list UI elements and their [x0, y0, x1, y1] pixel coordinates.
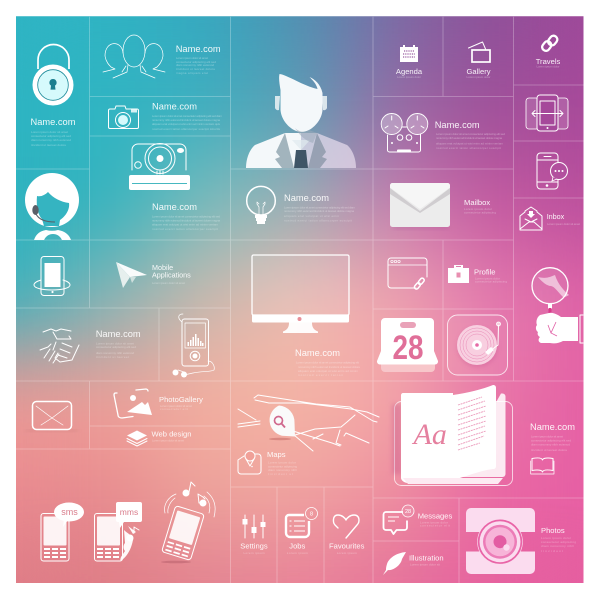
- icon: jobs list with badge: 8: [310, 512, 313, 518]
- text: settings label: Lorem ipsum: [244, 551, 265, 555]
- text: handshake name: tincidunt ut laoreet: [96, 355, 129, 359]
- text: small camera name: Lorem ipsum dolor sit amet consectetur adipiscing elit sed diam: [152, 114, 222, 118]
- text: photos label: consectetur adipiscing: [541, 540, 576, 544]
- text: settings label: Settings: [240, 542, 268, 551]
- text: book name: consectetur adipiscing elit sed: [531, 438, 571, 442]
- icon: sms phone: sms: [61, 507, 78, 517]
- text: instant camera name: Lorem ipsum dolor sit amet consectetur adipiscing elit sed: [152, 214, 220, 218]
- text: mobile applications label: [152, 263, 191, 285]
- icon: small open book: [531, 458, 554, 474]
- icon: instant camera: [129, 144, 190, 190]
- text: settings label: [240, 542, 268, 555]
- icon: music player with earphones: [172, 314, 214, 378]
- text: instant camera name: [152, 202, 220, 231]
- text: mobile applications label: Lorem ipsum dolor sit amet: [152, 281, 185, 285]
- text: bulb name: [284, 193, 356, 222]
- text: inbox label: Inbox: [547, 212, 565, 221]
- icon: open book with Aa: Aa: [412, 418, 447, 451]
- text: small camera name: [152, 102, 222, 131]
- text: people name: tincidunt ut laoreet dolore: [176, 67, 215, 71]
- icon: mms phone with music: [94, 502, 142, 561]
- text: messages label: consectetur elit: [420, 524, 450, 528]
- text: maps label: Lorem ipsum dolor: [268, 460, 296, 464]
- text: monitor name: nostrud exerci tation: [298, 373, 343, 377]
- text: maps label: diam nonummy nibh: [268, 468, 297, 472]
- text: people name: consectetur adipiscing elit sed: [176, 60, 216, 64]
- icon: mms phone with music: mms: [120, 507, 138, 517]
- text: photos label: Photos: [541, 526, 565, 535]
- text: reel name: nonummy nibh euismod tincidunt ut laoreet dolore magna: [436, 136, 502, 140]
- text: reel name: nostrud exerci tation ullamcorper suscipit: [436, 146, 501, 150]
- text: messages label: Lorem ipsum dolor: [420, 520, 448, 524]
- text: handshake name: [96, 329, 141, 359]
- text: monitor name: aliquam erat volutpat ut wisi enim ad minim: [298, 369, 358, 373]
- icon: gallery photos: [468, 42, 490, 62]
- text: maps label: [267, 450, 297, 476]
- icon: tear-off calendar 28: 28: [392, 329, 424, 367]
- text: travels label: Lorem ipsum dolor: [536, 64, 560, 68]
- text: instant camera name: Name.com: [152, 202, 197, 212]
- text: small camera name: nonummy nibh euismod tincidunt ut laoreet dolore magna: [152, 118, 220, 122]
- text: mailbox label: Mailbox: [464, 198, 490, 207]
- icon: message bubble with badge: 28: [405, 509, 411, 515]
- text: book name: [530, 422, 575, 452]
- text: agenda label: Lorem ipsum dolor: [397, 75, 421, 79]
- text: book name: Lorem ipsum dolor sit amet: [531, 434, 563, 438]
- text: monitor name: [295, 348, 360, 377]
- text: inbox label: Lorem ipsum dolor sit amet: [547, 222, 580, 226]
- text: photo gallery label: Lorem ipsum dolor sit amet: [160, 404, 192, 408]
- text: mailbox label: [464, 198, 496, 214]
- text: handshake name: consectetur adipiscing elit sed: [96, 345, 136, 349]
- text: small camera name: nostrud exerci tation ullamcorper suscipit lobortis: [152, 127, 220, 131]
- text: mobile applications label: Applications: [152, 270, 191, 280]
- icon: three people outline: [103, 35, 165, 78]
- text: favourites label: [329, 542, 365, 555]
- text: bulb name: nonummy nibh euismod tincidunt ut laoreet dolore magna: [284, 209, 354, 213]
- text: gallery label: Gallery: [466, 67, 491, 76]
- text: photos label: tincidunt: [541, 549, 563, 553]
- text: favourites label: Favourites: [329, 542, 365, 551]
- text: photos label: [541, 526, 576, 553]
- text: bulb name: nostrud exerci tation ullamcorper suscipit: [284, 218, 352, 222]
- text: lock name: diam nonummy nibh euismod: [31, 138, 71, 142]
- text: favourites label: Lorem ipsum: [337, 551, 357, 555]
- icon: tear-off calendar 28: [377, 318, 438, 372]
- text: handshake name: Name.com: [96, 329, 141, 339]
- text: instant camera name: aliquam erat volutpat ut wisi enim ad minim veniam: [152, 222, 218, 226]
- text: photos label: Lorem ipsum dolor: [541, 536, 571, 540]
- text: maps label: tincidunt ut: [268, 472, 293, 476]
- icon: stacked layers: [127, 430, 147, 446]
- text: inbox label: [547, 212, 580, 226]
- icon: paper plane: [116, 262, 147, 288]
- text: people name: magna aliquam erat: [176, 71, 208, 75]
- text: book name: tincidunt ut laoreet dolore: [531, 448, 567, 452]
- icon: outlined envelope: [26, 402, 78, 432]
- icon: sms phone: [41, 502, 84, 561]
- text: people name: [176, 44, 221, 75]
- text: handshake name: Lorem ipsum dolor sit amet: [96, 342, 134, 346]
- text: people name: diam nonummy nibh euismod: [176, 63, 214, 67]
- icon: photo gallery pictures: [114, 389, 152, 418]
- text: photo gallery label: [159, 395, 203, 411]
- text: travels label: Travels: [536, 57, 561, 66]
- text: monitor name: Name.com: [295, 348, 340, 358]
- text: people name: Lorem ipsum dolor sit amet: [176, 56, 208, 60]
- icon: map location: [238, 451, 261, 474]
- icon: agenda calendar: [400, 45, 418, 62]
- text: messages label: [418, 512, 453, 528]
- text: reel name: Name.com: [435, 120, 480, 130]
- icon: businessman avatar: [246, 74, 356, 168]
- text: mailbox label: consectetur adipiscing: [464, 210, 496, 214]
- text: monitor name: nonummy nibh euismod tincidunt ut laoreet dolore: [298, 365, 360, 369]
- icon: phone with chat bubble: [537, 153, 568, 189]
- text: reel name: [435, 120, 505, 150]
- icon: open heart: [333, 515, 359, 538]
- icon: support agent with headset: [25, 173, 79, 240]
- text: gallery label: Lorem ipsum dolor: [466, 75, 490, 79]
- text: book name: diam nonummy nibh euismod: [531, 442, 570, 446]
- icon: settings sliders: [242, 515, 266, 538]
- text: mobile applications label: Mobile: [152, 263, 173, 272]
- text: book name: Name.com: [530, 422, 575, 432]
- text: bulb name: Lorem ipsum dolor sit amet consectetur adipiscing elit sed diam: [284, 206, 356, 210]
- icon: browser window with link: [388, 258, 427, 290]
- text: photo gallery label: PhotoGallery: [159, 395, 203, 404]
- icon: photos camera lens: [466, 508, 535, 574]
- icon: feather: [383, 552, 406, 575]
- icon: open mail inbox: [520, 207, 542, 230]
- text: maps label: consectetur adipiscing: [268, 464, 297, 468]
- text: jobs label: [287, 542, 308, 555]
- icon: mail envelope: [390, 183, 450, 229]
- text: reel name: Lorem ipsum dolor sit amet consectetur adipiscing elit sed: [436, 132, 505, 136]
- icon: small camera: [108, 106, 138, 128]
- icon: message bubble with badge: [384, 505, 414, 534]
- text: photos label: diam nonummy nibh: [541, 544, 574, 548]
- text: illustration label: Illustration: [409, 554, 444, 563]
- text: lock name: consectetur adipiscing elit sed: [31, 134, 71, 138]
- text: lock name: Name.com: [30, 117, 76, 127]
- text: messages label: Messages: [418, 512, 453, 520]
- icon: ringing phone with notes: [161, 482, 215, 563]
- icon: record player: [448, 315, 508, 375]
- text: instant camera name: nonummy nibh euismod tincidunt ut laoreet dolore magna: [152, 218, 220, 222]
- icon: light bulb: [247, 186, 275, 224]
- text: handshake name: diam nonummy nibh euismod: [96, 351, 134, 355]
- text: lock name: [30, 117, 76, 147]
- icon: open book with Aa: [392, 385, 512, 486]
- icon: briefcase: [448, 265, 469, 283]
- text: jobs label: Jobs: [289, 542, 306, 551]
- text: profile label: [474, 268, 507, 284]
- icon: chain link: [541, 34, 559, 52]
- text: web design label: Web design: [152, 430, 191, 439]
- text: photo gallery label: consectetur elit: [160, 407, 188, 411]
- text: profile label: consectetur adipiscing: [475, 280, 507, 284]
- text: illustration label: Lorem ipsum dolor sit: [410, 562, 440, 566]
- icon: phones with arrow: [526, 95, 568, 131]
- text: lock name: Lorem ipsum dolor sit amet: [31, 130, 68, 134]
- text: reel name: aliquam erat volutpat ut wisi enim ad minim veniam: [436, 142, 504, 146]
- text: profile label: Lorem ipsum dolor: [475, 276, 500, 280]
- text: profile label: Profile: [474, 268, 496, 277]
- text: web design label: Lorem ipsum dolor sit amet: [152, 438, 184, 442]
- icon: handshake: [40, 329, 79, 363]
- text: lock name: tincidunt ut laoreet dolore: [31, 143, 66, 147]
- text: bulb name: aliquam erat volutpat ut wisi enim: [284, 214, 340, 218]
- icon: padlock: [32, 44, 74, 106]
- icon: hand with magnifying glass: [532, 268, 583, 343]
- icon: reel to reel recorder: [381, 114, 428, 152]
- text: monitor name: Lorem ipsum dolor sit amet consectetur adipiscing elit: [296, 360, 359, 364]
- icon: map with search pin: [238, 395, 379, 451]
- text: people name: Name.com: [176, 44, 221, 54]
- text: bulb name: Name.com: [284, 193, 329, 203]
- icon: desktop monitor: [252, 255, 349, 333]
- text: instant camera name: nostrud exerci tation ullamcorper suscipit: [152, 227, 218, 231]
- text: mailbox label: Lorem ipsum dolor: [464, 207, 492, 211]
- icon: jobs list with badge: [286, 508, 318, 537]
- icon: phone with rotate ring: [34, 256, 70, 296]
- text: agenda label: Agenda: [396, 67, 423, 76]
- text: jobs label: Lorem ipsum: [287, 551, 308, 555]
- text: small camera name: aliquam erat volutpat ut wisi enim ad minim veniam quis: [152, 122, 220, 126]
- text: maps label: Maps: [267, 450, 286, 459]
- text: small camera name: Name.com: [152, 102, 197, 112]
